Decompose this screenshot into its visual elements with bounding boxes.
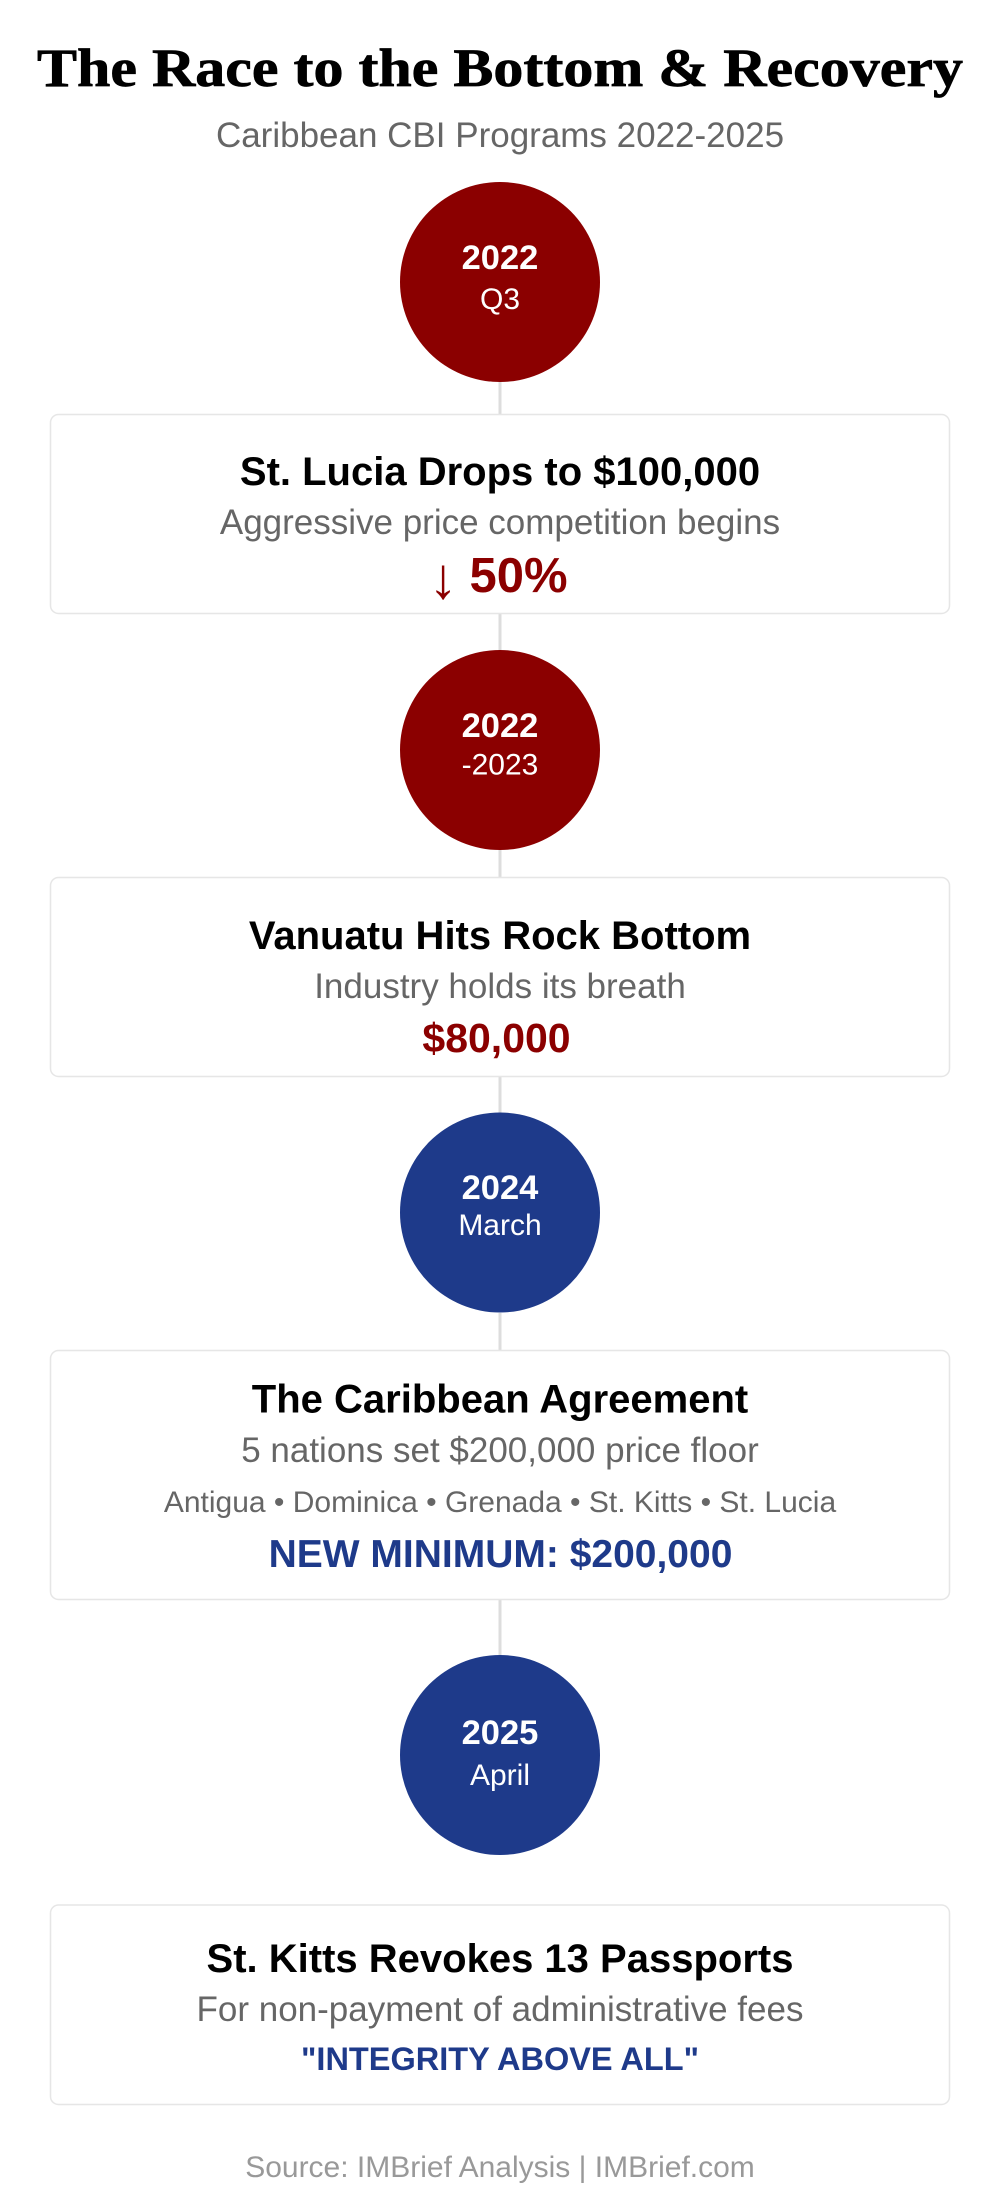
milestone: 2025 April: April (470, 1759, 530, 1792)
panel: St. Lucia (50, 414, 950, 614)
milestone: 2022-2023: 2022 (462, 707, 538, 745)
panel: Caribbean Agreement: 5 nations set $200,000 price floor (241, 1431, 759, 1470)
milestone: 2022 Q3: Q3 (480, 283, 520, 316)
panel: St. Kitts: St. Kitts Revokes 13 Passports (207, 1937, 793, 1981)
panel: Caribbean Agreement (50, 1350, 950, 1600)
panel: Caribbean Agreement: NEW MINIMUM: $200,000 (269, 1533, 732, 1576)
panel: Vanuatu: Industry holds its breath (314, 967, 686, 1006)
panel: St. Kitts (50, 1905, 950, 2104)
milestone: 2024 March (400, 1112, 600, 1312)
milestone: 2024 March: March (458, 1209, 542, 1242)
milestone: 2022-2023 (400, 650, 600, 850)
milestone: 2024 March: 2024 (462, 1169, 538, 1207)
panel: St. Lucia: Aggressive price competition begins (220, 503, 780, 542)
panel: St. Lucia: St. Lucia Drops to $100,000 (240, 450, 760, 494)
panel: Caribbean Agreement: The Caribbean Agreement (252, 1378, 748, 1422)
source: Source: IMBrief Analysis | IMBrief.com (245, 2151, 755, 2184)
milestone: 2025 April: 2025 (462, 1714, 538, 1752)
panel: St. Lucia: ↓ (428, 546, 458, 611)
panel: Caribbean Agreement: Antigua • Dominica • Grenada • St. Kitts • St. Lucia (164, 1486, 836, 1519)
milestone: 2022 Q3: 2022 (462, 239, 538, 277)
subtitle: Caribbean CBI Programs 2022-2025 (216, 116, 784, 155)
panel: St. Lucia: 50% (469, 549, 568, 603)
panel: Vanuatu: $80,000 (422, 1015, 571, 1061)
title: The Race to the Bottom & Recovery (37, 38, 963, 98)
milestone: 2022-2023: -2023 (462, 748, 538, 782)
milestone: 2022 Q3 (400, 182, 600, 382)
milestone: 2025 April (400, 1655, 600, 1855)
panel: Vanuatu (50, 878, 950, 1076)
panel: Vanuatu: Vanuatu Hits Rock Bottom (249, 914, 751, 958)
panel: St. Kitts: For non-payment of administrative fees (197, 1990, 803, 2029)
panel: St. Kitts: "INTEGRITY ABOVE ALL" (301, 2041, 699, 2077)
